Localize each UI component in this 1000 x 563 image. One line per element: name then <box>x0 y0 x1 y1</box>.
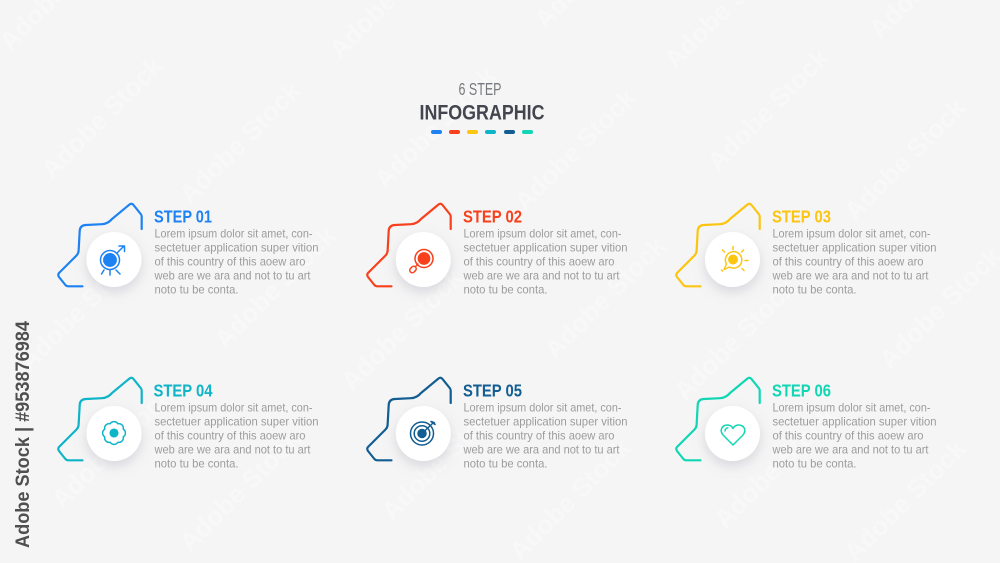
description: web are we ara and not to tu art <box>154 270 311 282</box>
description: of this country of this aoew aro <box>464 430 614 442</box>
heading: STEP 05 <box>463 380 522 400</box>
text: Adobe Stock <box>375 392 509 526</box>
icon: magnifier <box>409 250 433 274</box>
description: Lorem ipsum dolor sit amet, con- <box>464 402 622 414</box>
outline shape <box>367 204 451 286</box>
text: Adobe Stock <box>35 50 169 184</box>
text: Adobe Stock <box>45 380 179 514</box>
description <box>463 402 628 470</box>
description: noto tu be conta. <box>154 458 238 470</box>
description: noto tu be conta. <box>464 284 548 296</box>
description: web are we ara and not to tu art <box>463 444 620 456</box>
description: sectetuer application super vition <box>772 416 936 428</box>
description: sectetuer application super vition <box>772 242 936 254</box>
description: of this country of this aoew aro <box>154 430 306 442</box>
icon: bullseye with dart <box>410 422 435 445</box>
heading: STEP 03 <box>772 206 831 226</box>
description: Lorem ipsum dolor sit amet, con- <box>772 228 931 240</box>
outline shape <box>58 378 142 460</box>
text: Adobe Stock <box>838 92 972 226</box>
outline shape <box>58 204 142 286</box>
text: Adobe Stock <box>173 423 307 557</box>
description: web are we ara and not to tu art <box>463 270 620 282</box>
icon circle <box>396 232 451 287</box>
panel: step 05 <box>367 378 628 470</box>
panel: step 02 <box>367 204 628 296</box>
text: Adobe Stock <box>208 220 342 354</box>
description: sectetuer application super vition <box>154 242 318 254</box>
outline shape <box>676 204 760 286</box>
heading: STEP 01 <box>154 206 212 226</box>
description <box>463 228 628 296</box>
text: Adobe Stock <box>13 242 147 376</box>
description: sectetuer application super vition <box>464 242 628 254</box>
title <box>420 79 544 124</box>
description: of this country of this aoew aro <box>464 256 614 268</box>
outline shape <box>676 378 760 460</box>
icon: target with arrow <box>100 246 124 275</box>
description: Lorem ipsum dolor sit amet, con- <box>154 402 313 414</box>
description <box>772 402 936 470</box>
heading: STEP 02 <box>463 206 522 226</box>
icon: heart <box>721 425 745 445</box>
title: 6 STEP <box>458 79 502 99</box>
icon: light bulb <box>722 246 748 271</box>
colour key dashes <box>431 130 533 134</box>
text: Adobe Stock <box>668 272 802 406</box>
description: Lorem ipsum dolor sit amet, con- <box>464 228 622 240</box>
text: Adobe Stock <box>335 262 469 396</box>
heading: STEP 04 <box>154 380 213 400</box>
description: Lorem ipsum dolor sit amet, con- <box>772 402 931 414</box>
description: noto tu be conta. <box>154 284 238 296</box>
outline shape <box>367 378 451 460</box>
panel: step 01 <box>58 204 318 296</box>
description: web are we ara and not to tu art <box>154 444 311 456</box>
description: web are we ara and not to tu art <box>772 270 929 282</box>
text: Adobe Stock <box>508 82 642 216</box>
description <box>154 402 318 470</box>
icon circle <box>396 406 451 461</box>
description: of this country of this aoew aro <box>154 256 306 268</box>
icon: gear flower <box>103 422 125 444</box>
text: Adobe Stock <box>708 400 842 534</box>
heading: STEP 06 <box>772 380 831 400</box>
description: noto tu be conta. <box>772 458 856 470</box>
description: web are we ara and not to tu art <box>772 444 929 456</box>
icon circle <box>86 406 142 461</box>
panel: step 03 <box>676 204 936 296</box>
stock credit: Adobe Stock | #953876984 <box>13 321 34 548</box>
icon circle <box>705 406 760 461</box>
text: Adobe Stock <box>503 432 637 563</box>
icon circle <box>86 232 142 287</box>
icon circle <box>705 232 760 287</box>
panel: step 06 <box>676 378 936 470</box>
description: Lorem ipsum dolor sit amet, con- <box>154 228 313 240</box>
description: noto tu be conta. <box>464 458 548 470</box>
text: Adobe Stock <box>538 230 672 364</box>
description: sectetuer application super vition <box>464 416 628 428</box>
description <box>154 228 318 296</box>
description: noto tu be conta. <box>772 284 856 296</box>
description <box>772 228 936 296</box>
text: Adobe Stock <box>701 42 835 176</box>
description: sectetuer application super vition <box>154 416 318 428</box>
description: of this country of this aoew aro <box>772 256 924 268</box>
text: Adobe Stock <box>173 75 307 209</box>
title: INFOGRAPHIC <box>420 100 544 124</box>
panel: step 04 <box>58 378 318 470</box>
text: Adobe Stock <box>368 60 502 194</box>
description: of this country of this aoew aro <box>772 430 924 442</box>
